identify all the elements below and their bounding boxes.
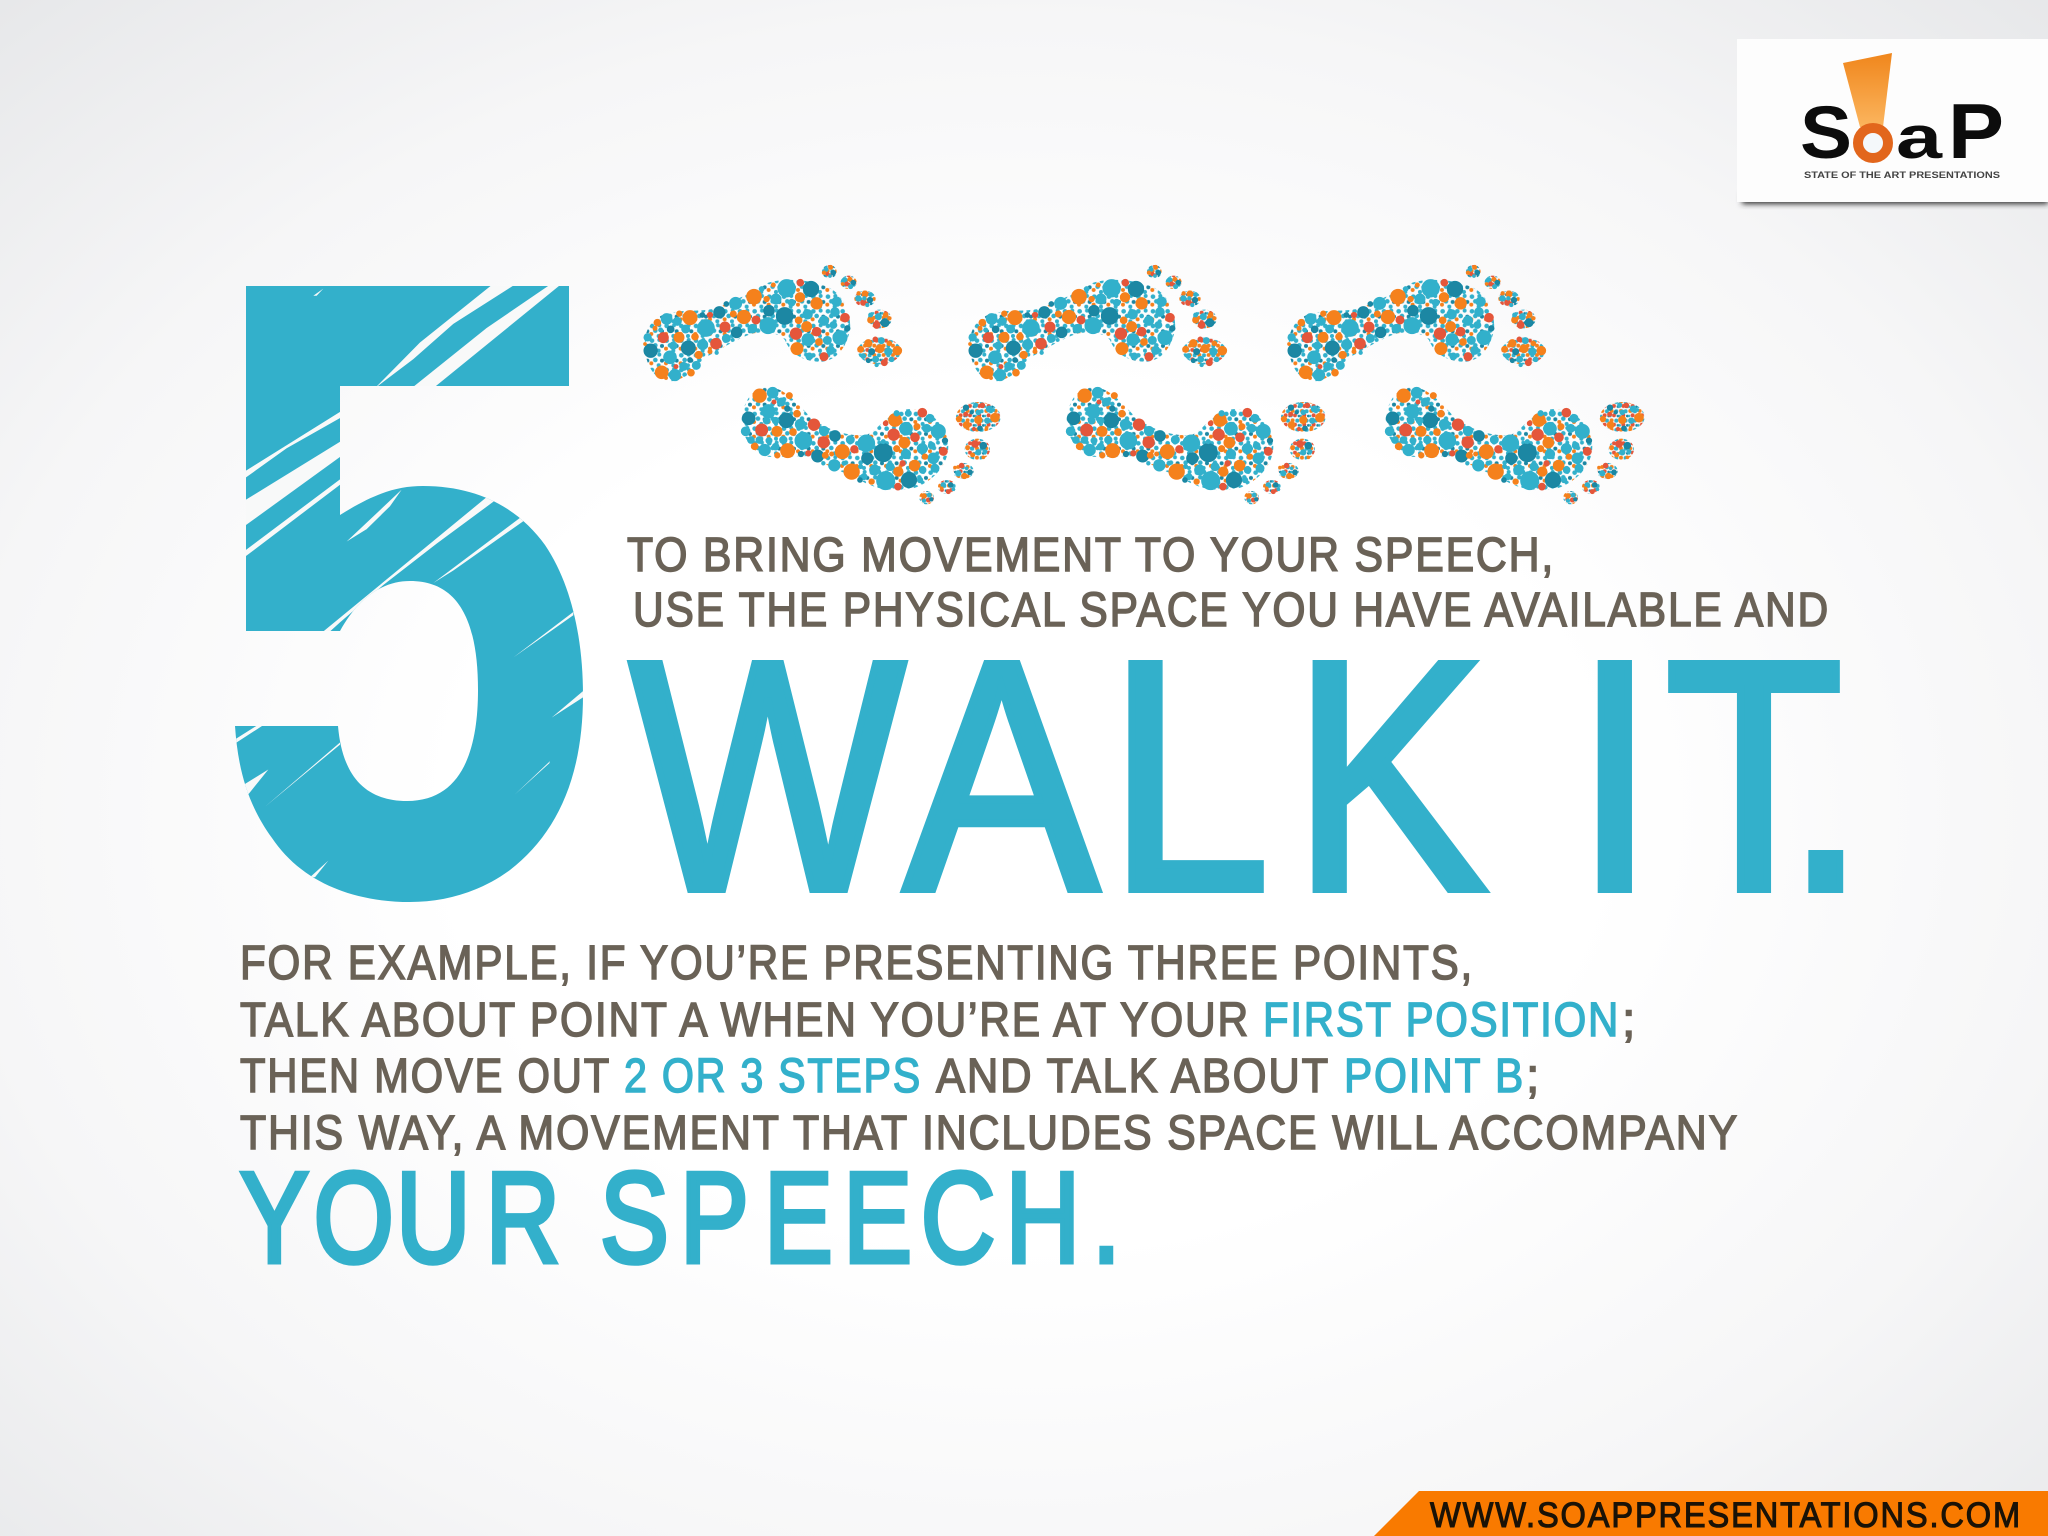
body text: AND TALK ABOUT [936,1050,1330,1103]
footprint: top 2 [969,265,1227,382]
heading: walk it: WALK IT. [630,593,1866,959]
intro text [627,529,1830,637]
closing heading: your speech: YOUR SPEECH. [240,1145,1121,1290]
body text: ; [1526,1050,1541,1103]
body text: POINT B [1344,1050,1525,1103]
body text: FIRST POSITION [1263,994,1620,1047]
body text: THEN MOVE OUT [240,1050,611,1103]
footprints [644,265,1645,504]
body text: THIS WAY, A MOVEMENT THAT INCLUDES SPACE WILL ACCOMPANY [240,1107,1739,1160]
footer url: WWW.SOAPPRESENTATIONS.COM [1430,1496,2022,1535]
body text: FOR EXAMPLE, IF YOU’RE PRESENTING THREE POINTS, [240,937,1474,990]
logo wordmark: P [1948,87,2004,175]
logo exclamation mark [1843,53,1892,127]
body text: TALK ABOUT POINT A WHEN YOU’RE AT YOUR [240,994,1250,1047]
footprint: top 3 [1288,265,1546,382]
footprint: bottom 2 [1066,387,1326,504]
logo wordmark [1800,87,2004,175]
body text: ; [1622,994,1637,1047]
logo panel [1737,39,2048,204]
body text: 2 OR 3 STEPS [624,1050,922,1103]
big number 5 [230,280,590,910]
body text [240,937,1739,1160]
logo wordmark: a [1896,104,1943,171]
intro text: TO BRING MOVEMENT TO YOUR SPEECH, [627,529,1555,582]
logo tagline: STATE OF THE ART PRESENTATIONS [1804,170,2000,180]
footer banner [1374,1491,2048,1536]
footprint: bottom 1 [741,387,1001,504]
footprint: bottom 3 [1385,387,1645,504]
intro text: USE THE PHYSICAL SPACE YOU HAVE AVAILABLE AND [633,584,1830,637]
footprint: top 1 [644,265,902,382]
logo wordmark: S [1800,91,1852,174]
